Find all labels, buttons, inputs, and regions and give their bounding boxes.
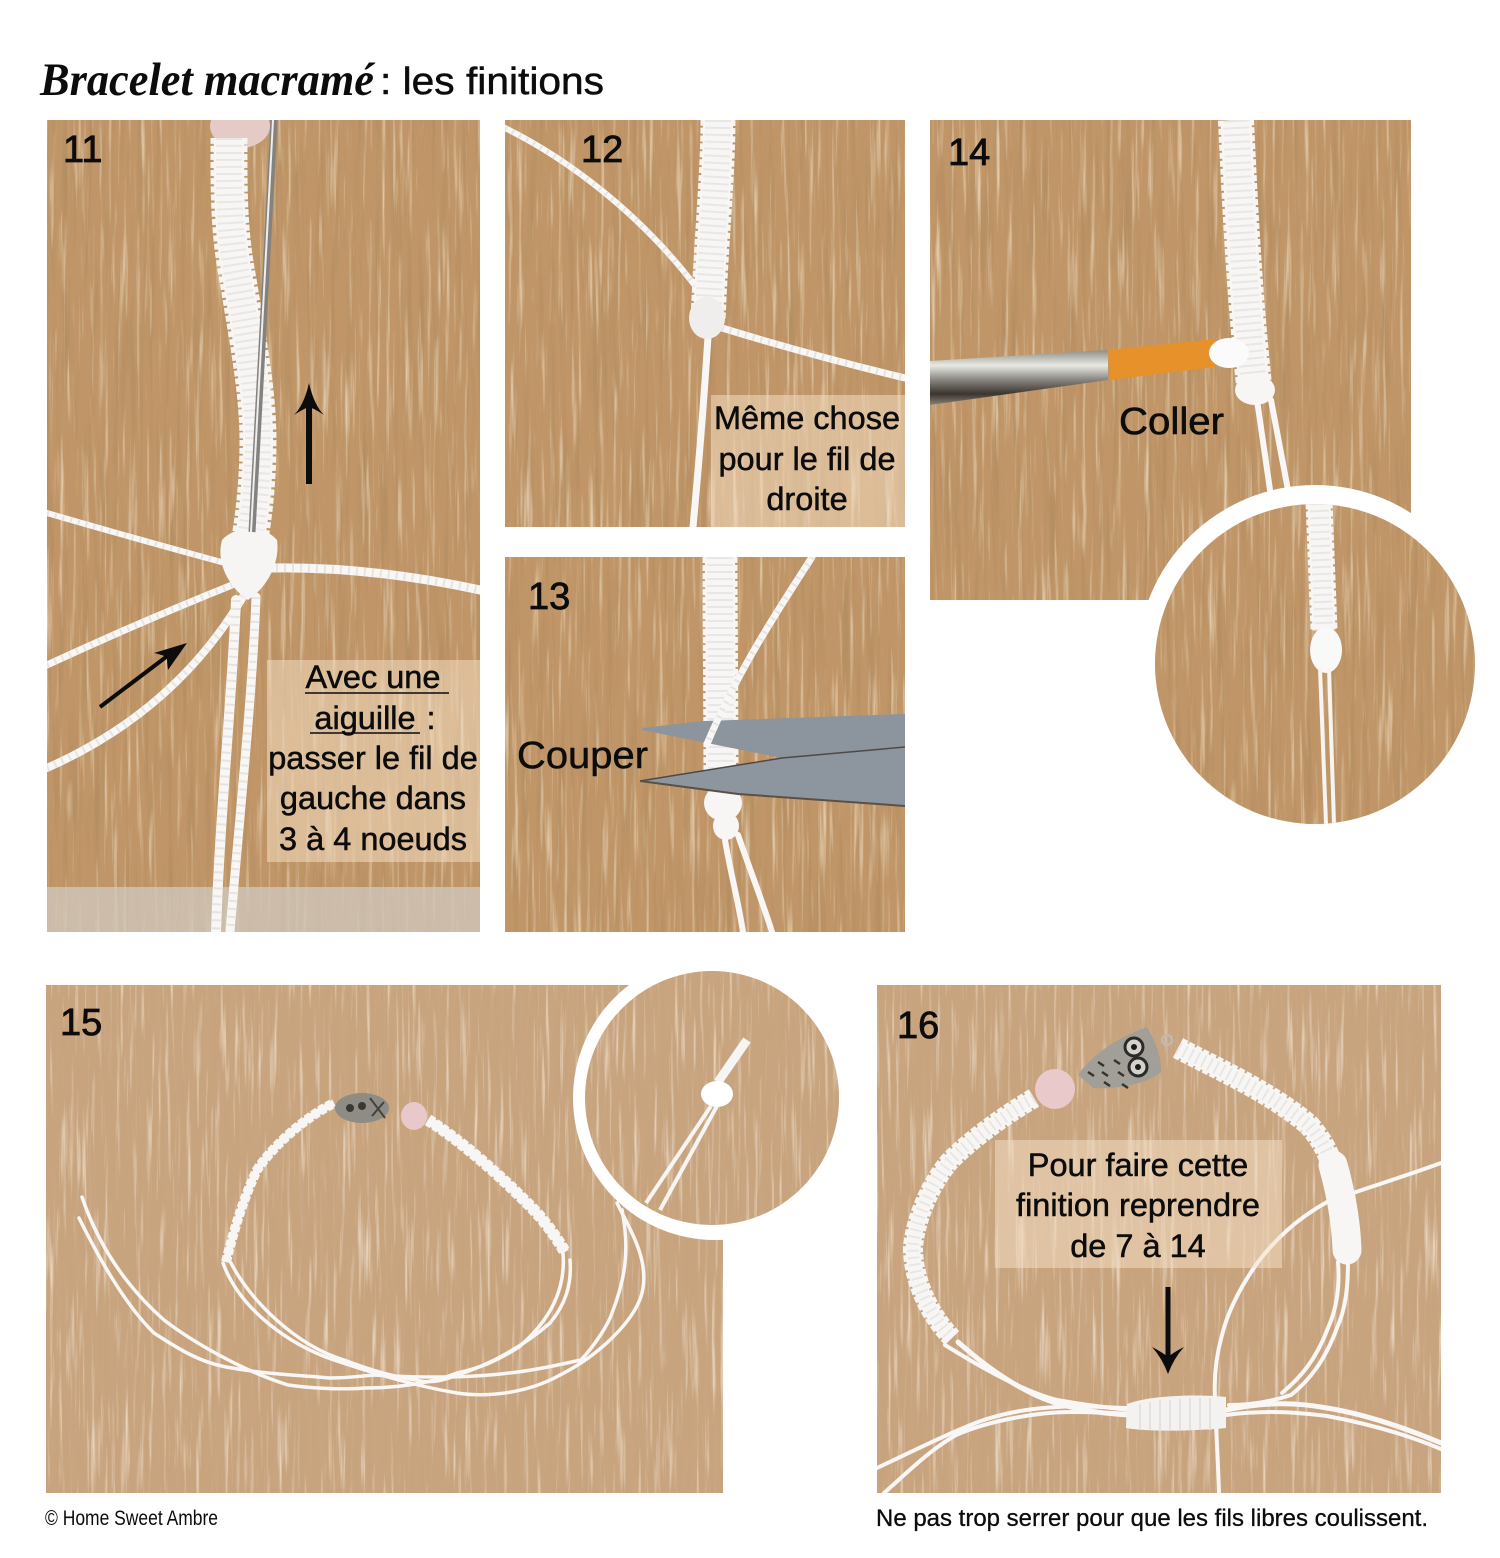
threads bbox=[1257, 400, 1288, 490]
panel: step 13 bbox=[505, 557, 905, 932]
panel: step 11: : bbox=[426, 700, 436, 736]
scissors bbox=[640, 714, 905, 806]
panel: step 16: de 7 à 14 bbox=[1070, 1228, 1206, 1264]
panel: step 11: gauche dans bbox=[280, 780, 466, 816]
panel: step 11: Avec une bbox=[306, 659, 440, 695]
macrame cord bbox=[229, 138, 258, 560]
number: 14 bbox=[948, 132, 990, 174]
number: 16 bbox=[897, 1005, 939, 1047]
macrame cord bbox=[1235, 120, 1275, 405]
panel: step 12: pour le fil de bbox=[718, 441, 896, 477]
inset: step 14 detail bbox=[1137, 485, 1493, 841]
panel: step 15 bbox=[46, 985, 723, 1493]
bracelet left cord bbox=[226, 1103, 334, 1262]
macrame cord bbox=[708, 120, 718, 320]
brush bbox=[930, 338, 1249, 405]
cord end bbox=[704, 791, 742, 840]
title: : les finitions bbox=[380, 61, 604, 103]
panel: step 16: Pour faire cette bbox=[1028, 1147, 1248, 1183]
thread crossing blade bbox=[707, 557, 812, 744]
panel: step 16: finition reprendre bbox=[1016, 1187, 1260, 1223]
sliding knot bbox=[1126, 1395, 1226, 1431]
left cord bbox=[913, 1098, 1034, 1338]
arrow diagonal bbox=[100, 643, 187, 707]
knot bbox=[689, 297, 725, 339]
bracelet right cord bbox=[428, 1120, 565, 1252]
label: Couper bbox=[517, 735, 648, 777]
copyright: © Home Sweet Ambre bbox=[45, 1507, 218, 1530]
label: Coller bbox=[1119, 401, 1224, 443]
arrow up bbox=[294, 383, 324, 484]
title bbox=[39, 54, 604, 106]
needle bbox=[252, 120, 274, 532]
caption box bbox=[995, 1140, 1282, 1268]
number: 13 bbox=[528, 576, 570, 618]
bead bbox=[210, 120, 270, 148]
pink bead bbox=[1035, 1069, 1075, 1109]
macrame cord bbox=[720, 557, 721, 770]
number: 11 bbox=[63, 129, 102, 171]
panel: step 11: passer le fil de bbox=[268, 740, 478, 776]
free threads bbox=[877, 1163, 1441, 1493]
owl charm bbox=[1078, 1027, 1172, 1088]
panel: step 12 bbox=[505, 120, 905, 527]
panel: step 11: 3 à 4 noeuds bbox=[279, 821, 467, 857]
tape at bottom bbox=[47, 887, 480, 932]
threads bbox=[505, 128, 905, 527]
panel: step 12: droite bbox=[766, 481, 848, 517]
inset: step 15 detail bbox=[573, 956, 857, 1240]
panel: step 11 bbox=[47, 104, 480, 932]
caption box bbox=[267, 660, 480, 862]
title: Bracelet macramé bbox=[39, 54, 376, 106]
free threads bbox=[47, 513, 480, 932]
arrow down bbox=[1152, 1287, 1184, 1374]
footnote: Ne pas trop serrer pour que les fils libres coulissent. bbox=[876, 1505, 1428, 1532]
panel: step 11: aiguille bbox=[314, 700, 416, 736]
panel: step 16 bbox=[877, 985, 1441, 1493]
knot bbox=[220, 529, 278, 600]
right cord bbox=[1178, 1048, 1347, 1250]
free threads bbox=[79, 1197, 644, 1395]
number: 15 bbox=[60, 1002, 102, 1044]
owl charm bbox=[335, 1093, 389, 1123]
panel: step 14 bbox=[930, 120, 1411, 600]
threads bbox=[725, 835, 772, 932]
number: 12 bbox=[581, 129, 623, 171]
panel: step 12: Même chose bbox=[714, 400, 900, 436]
pink bead bbox=[401, 1102, 427, 1130]
caption box bbox=[711, 395, 905, 527]
